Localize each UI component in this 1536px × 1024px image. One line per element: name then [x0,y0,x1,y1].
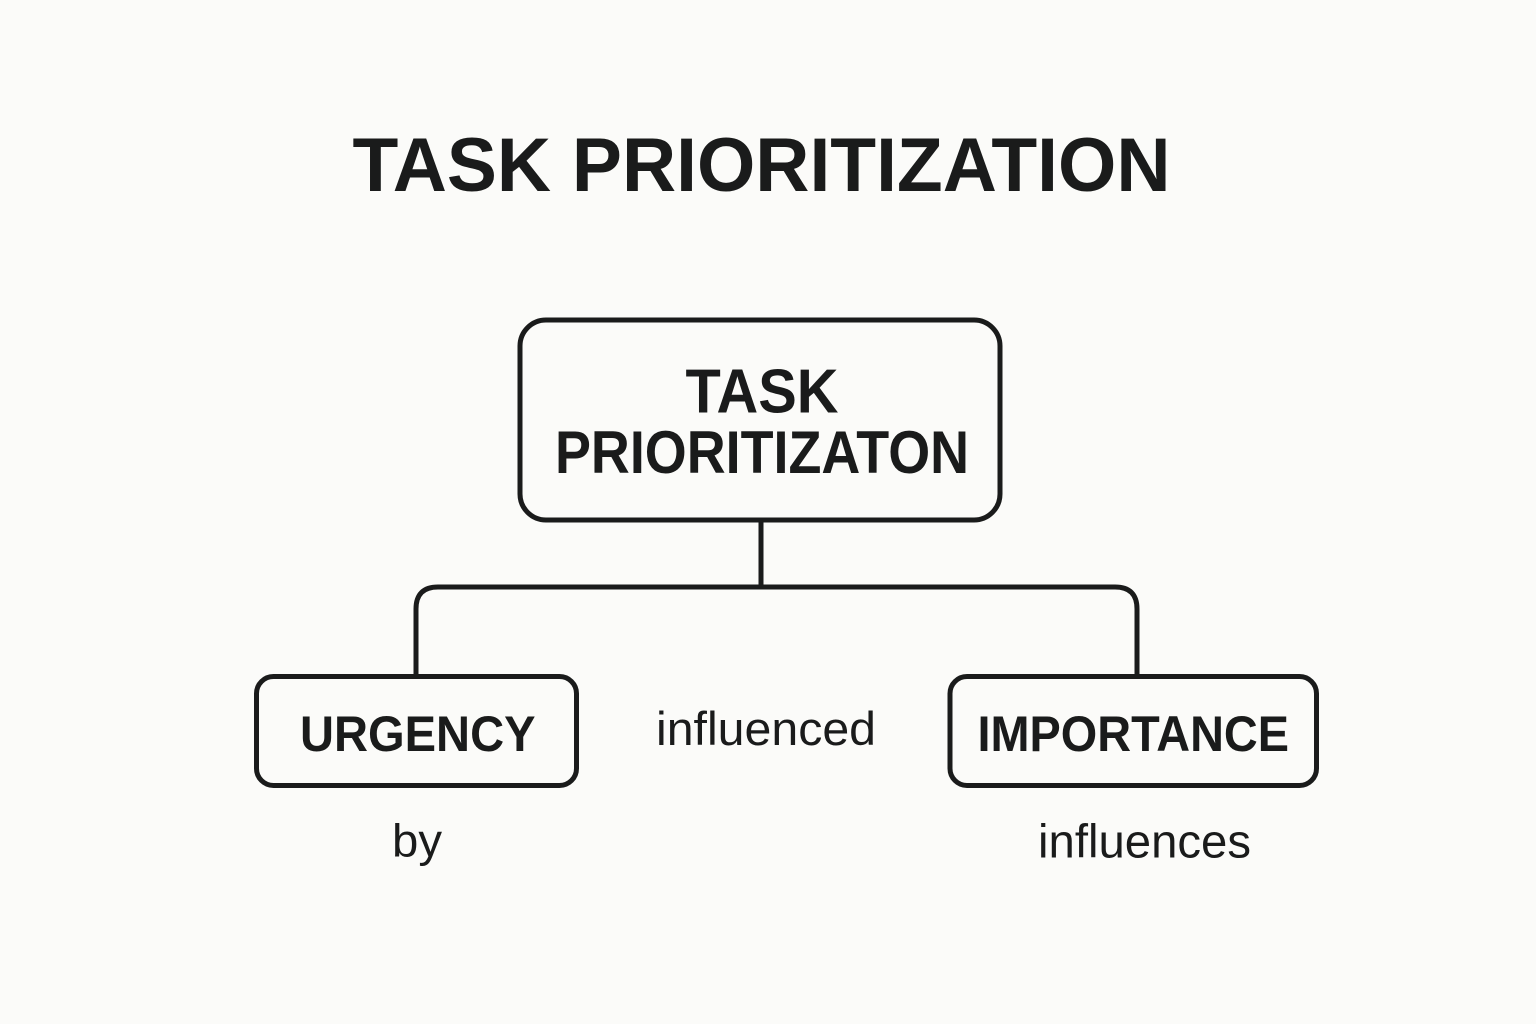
connector lines between top box and child boxes [416,520,1137,677]
box: urgency: URGENCY [300,706,536,762]
label: influences: influences [1038,814,1251,868]
box: task prioritization: TASK [686,358,839,426]
box: importance: IMPORTANCE [978,706,1289,762]
box: task prioritization [520,320,1000,520]
box: task prioritization: PRIORITIZATON [555,418,969,486]
box: importance [950,676,1316,786]
title: TASK PRIORITIZATION [352,123,1170,208]
box: urgency [256,676,576,786]
label: influenced: influenced [656,702,876,755]
label: by: by [392,814,442,866]
